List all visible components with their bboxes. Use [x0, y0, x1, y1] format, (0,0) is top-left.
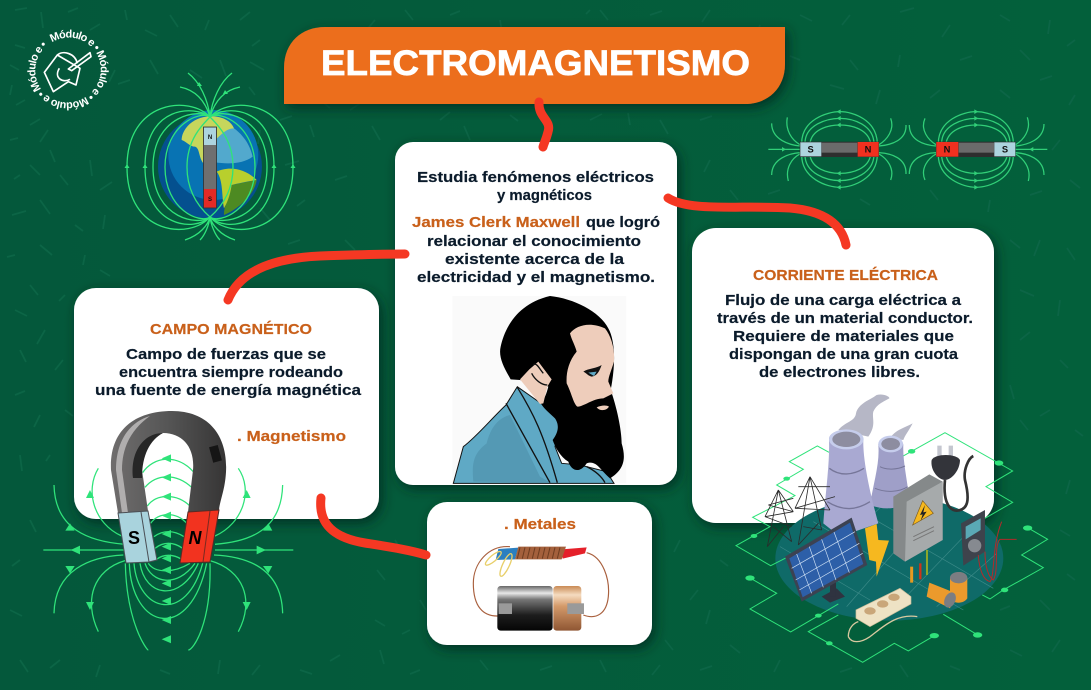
heading: corriente eléctrica: CORRIENTE ELÉCTRICA: [753, 267, 938, 284]
text: Maxwell: que logró: [586, 214, 660, 231]
text: corriente description: dispongan de una gran cuota: [729, 346, 959, 363]
title: ELECTROMAGNETISMO: [321, 44, 750, 83]
right bar magnet: S: [1002, 145, 1008, 155]
connector: campo to metales: [321, 498, 426, 555]
illustration: Earth with magnetic field: [124, 73, 296, 240]
text: studies: y magnéticos: [497, 187, 592, 204]
pylons: [765, 477, 835, 547]
title banner: [284, 27, 785, 104]
smoke: [838, 395, 913, 440]
text: campo description: [95, 346, 362, 399]
text: studies: Estudia fenómenos eléctricos: [417, 169, 654, 186]
text: Maxwell: electricidad y el magnetismo.: [417, 269, 655, 286]
panel: metales: [427, 502, 652, 645]
left bar magnet: [800, 142, 879, 157]
right bar magnet: N: [944, 145, 951, 155]
text: Maxwell: existente acerca de la: [445, 251, 625, 268]
bar magnet in Earth: N: [208, 135, 212, 141]
illustration: horseshoe magnet with field lines: [43, 411, 293, 650]
text: corriente description: Flujo de una carga eléctrica a: [725, 292, 962, 309]
circuit traces: [736, 433, 1048, 662]
connector: top card to corriente: [668, 198, 846, 245]
power strip: [848, 616, 917, 642]
batteries: [950, 572, 967, 603]
left bar magnet: S: [808, 145, 814, 155]
text: corriente description: [717, 292, 973, 381]
text: campo description: Campo de fuerzas que se: [126, 346, 326, 363]
heading: campo magnético: CAMPO MAGNÉTICO: [150, 321, 312, 338]
text: studies: [417, 169, 654, 204]
illustration: electricity isometric scene: [736, 395, 1048, 662]
label: metales: . Metales: [504, 516, 576, 533]
connector: title to top card: [539, 102, 549, 147]
cooling tower back: [870, 437, 909, 508]
cooling tower front: [823, 430, 878, 537]
plug: [945, 456, 973, 511]
text: corriente description: través de un material conductor.: [717, 310, 973, 327]
text: corriente description: Requiere de materiales que: [733, 328, 954, 345]
multimeter: [961, 510, 985, 566]
text: corriente description: de electrones libres.: [759, 364, 920, 381]
panel: campo magnético: [74, 288, 379, 519]
solar panel: [822, 588, 845, 603]
logo: Módulo e: Módulo e • Módulo e • Módulo e • Módulo e •: [27, 30, 109, 110]
illustration: horseshoe magnet with field lines: S: [128, 528, 140, 548]
panel: corriente eléctrica: [692, 228, 994, 523]
text: Maxwell: relacionar el conocimiento: [427, 233, 641, 250]
electrical box: [893, 474, 943, 562]
text: Maxwell: James Clerk Maxwell: [412, 214, 580, 231]
bar magnet in Earth: S: [208, 197, 212, 203]
illustration: battery electromagnet: [473, 547, 609, 631]
label: magnetismo: . Magnetismo: [237, 428, 346, 445]
lightning bolt: [865, 524, 889, 577]
right bar magnet: [936, 142, 1016, 157]
text: campo description: una fuente de energía magnética: [95, 382, 362, 399]
text: Maxwell: [412, 214, 660, 286]
left bar magnet: N: [865, 145, 872, 155]
text: campo description: encuentra siempre rodeando: [119, 364, 343, 381]
panel: top card: [395, 142, 677, 485]
illustration: two bar magnets with field lines: [768, 109, 1047, 190]
connector: top card to campo: [228, 254, 405, 300]
illustration: horseshoe magnet with field lines: N: [188, 528, 202, 548]
portrait: James Clerk Maxwell: [452, 296, 626, 483]
bar magnet in Earth: [204, 127, 216, 208]
